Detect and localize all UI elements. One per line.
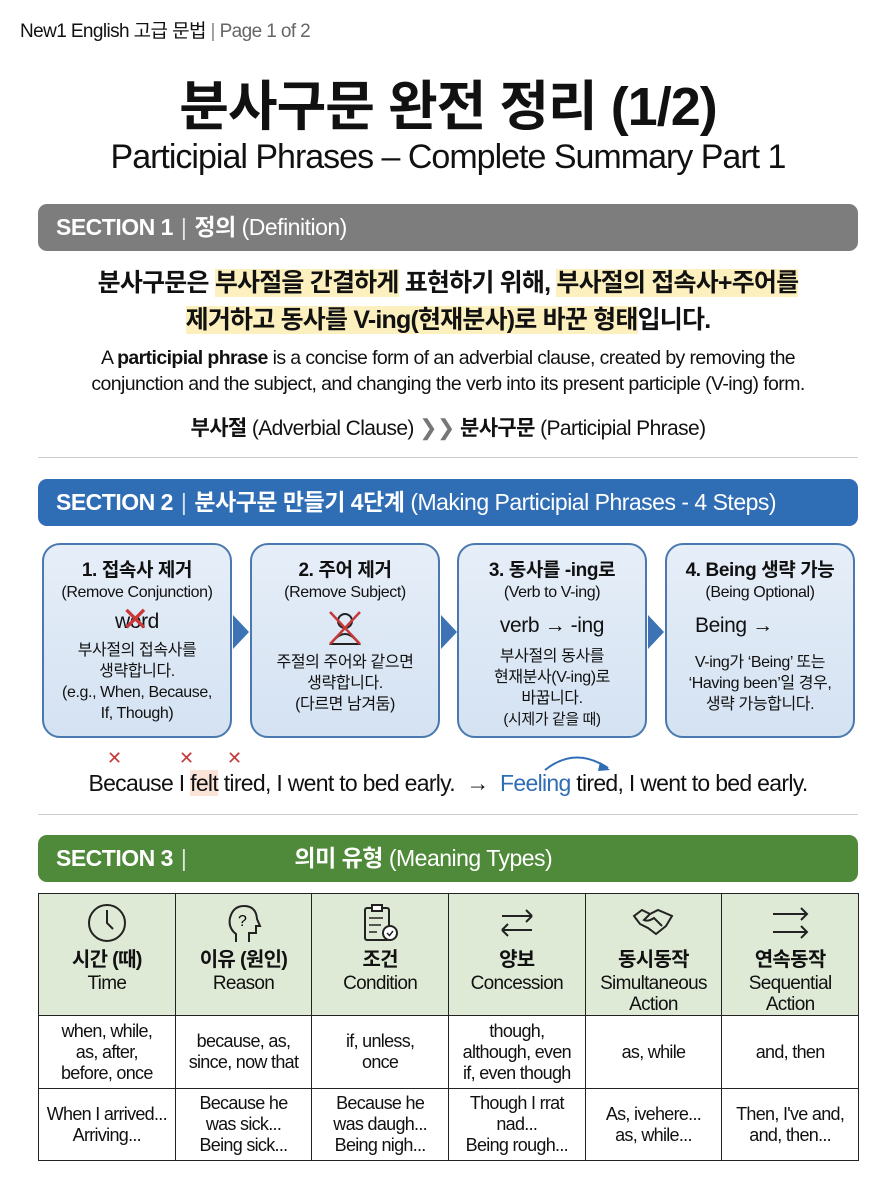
example sentence: ✕ bbox=[107, 748, 122, 768]
step 4: 4. Being 생략 가능 bbox=[686, 560, 834, 581]
meaning types table: Simultaneous bbox=[600, 973, 707, 994]
meaning types table: Because he bbox=[199, 1093, 288, 1113]
meaning types table: Though I rrat bbox=[470, 1093, 564, 1113]
meaning types table: if, unless, bbox=[346, 1031, 414, 1051]
step 3: 부사절의 동사를 bbox=[500, 648, 604, 665]
step 4: Being → bbox=[695, 614, 773, 637]
meaning types table: as, after, bbox=[76, 1042, 138, 1062]
step 1: 생략합니다. bbox=[99, 663, 175, 680]
meaning types table: 시간 (때) bbox=[72, 949, 142, 971]
meaning types table: because, as, bbox=[197, 1031, 290, 1051]
step 4: (Being Optional) bbox=[705, 584, 815, 601]
meaning types table: though, bbox=[489, 1020, 544, 1040]
example sentence bbox=[88, 748, 808, 796]
Korean definition bbox=[98, 269, 798, 334]
meaning types table: 이유 (원인) bbox=[200, 949, 287, 971]
meaning types table: although, even bbox=[463, 1042, 571, 1062]
meaning types table: As, ivehere... bbox=[606, 1104, 701, 1124]
section 3 bar: SECTION 3 | 의미 유형 (Meaning Types) bbox=[56, 845, 552, 871]
step 4: 생략 가능합니다. bbox=[706, 696, 814, 713]
meaning types table: Sequential bbox=[749, 973, 832, 994]
section 1 bar: SECTION 1 | 정의 (Definition) bbox=[56, 214, 347, 240]
step 2: 생략합니다. bbox=[307, 675, 383, 692]
step 2 bbox=[250, 543, 440, 738]
icon: crossed person bbox=[329, 611, 361, 645]
meaning types table: when, while, bbox=[62, 1020, 152, 1040]
step 4 bbox=[665, 543, 855, 738]
step 1: 부사절의 접속사를 bbox=[78, 642, 196, 659]
step 3 bbox=[457, 543, 647, 738]
step 2: (Remove Subject) bbox=[284, 584, 406, 601]
meaning types table: Then, I've and, bbox=[736, 1104, 844, 1124]
section 3 bar bbox=[38, 835, 858, 882]
Korean definition: 제거하고 동사를 V-ing(현재분사)로 바꾼 형태입니다. bbox=[186, 306, 710, 334]
step 3: 바꿉니다. bbox=[521, 690, 583, 707]
meaning types table: Being rough... bbox=[466, 1135, 568, 1155]
meaning types table: Reason bbox=[213, 973, 274, 994]
example sentence: Because I felt tired, I went to bed early. → Feeling tired, I went to bed early. bbox=[88, 770, 808, 796]
English definition: A participial phrase is a concise form of an adverbial clause, created by removing the bbox=[101, 347, 795, 369]
meaning types table: Being sick... bbox=[200, 1135, 287, 1155]
step 1: (Remove Conjunction) bbox=[61, 584, 213, 601]
step 1: 1. 접속사 제거 bbox=[82, 560, 192, 581]
meaning types table: if, even though bbox=[463, 1062, 571, 1082]
example sentence: ✕ bbox=[179, 748, 194, 768]
meaning types table: ? bbox=[238, 913, 247, 930]
subtitle: Participial Phrases – Complete Summary Part 1 bbox=[111, 138, 785, 176]
step 4: ‘Having been’일 경우, bbox=[689, 675, 831, 692]
arrow 3 bbox=[648, 615, 664, 649]
meaning types table: since, now that bbox=[189, 1052, 298, 1072]
meaning types table: once bbox=[362, 1052, 398, 1072]
step 3: (Verb to V-ing) bbox=[504, 584, 600, 601]
meaning types table: Being nigh... bbox=[335, 1135, 426, 1155]
step 3: verb → -ing bbox=[500, 614, 604, 637]
meaning types table: as, while... bbox=[615, 1124, 692, 1144]
example sentence: ✕ bbox=[227, 748, 242, 768]
meaning types table: 연속동작 bbox=[755, 949, 826, 971]
meaning types table: Action bbox=[766, 994, 814, 1015]
title: 분사구문 완전 정리 (1/2) bbox=[179, 77, 717, 137]
arrow 1 bbox=[233, 615, 249, 649]
meaning types table: 양보 bbox=[499, 949, 534, 971]
meaning types table: and, then... bbox=[749, 1124, 831, 1144]
section 1 bar bbox=[38, 204, 858, 251]
meaning types table: 동시동작 bbox=[618, 949, 689, 971]
meaning types table: Time bbox=[87, 973, 126, 994]
step 2: 2. 주어 제거 bbox=[298, 560, 392, 581]
meaning types table: and, then bbox=[756, 1042, 825, 1062]
meaning types table: Because he bbox=[336, 1093, 424, 1113]
step 1 bbox=[42, 543, 232, 738]
meaning types table: Arriving... bbox=[73, 1124, 141, 1144]
meaning types table bbox=[38, 893, 859, 1161]
English definition: conjunction and the subject, and changing the verb into its present participle (V-ing) form. bbox=[91, 373, 805, 395]
meaning types table: was sick... bbox=[206, 1114, 281, 1134]
section 2 bar: SECTION 2 | 분사구문 만들기 4단계 (Making Participial Phrases - 4 Steps) bbox=[56, 489, 776, 515]
step 2: 주절의 주어와 같으면 bbox=[276, 654, 413, 671]
English definition bbox=[91, 347, 805, 395]
step 1: (e.g., When, Because, bbox=[62, 684, 212, 701]
meaning types table: before, once bbox=[61, 1062, 153, 1082]
section 2 bar bbox=[38, 479, 858, 526]
meaning types table: Concession bbox=[471, 973, 563, 994]
meaning types table: was daugh... bbox=[333, 1114, 427, 1134]
step 4: V-ing가 ‘Being’ 또는 bbox=[695, 654, 825, 671]
meaning types table: as, while bbox=[622, 1042, 685, 1062]
meaning types table: nad... bbox=[496, 1114, 537, 1134]
step 3: 3. 동사를 -ing로 bbox=[489, 560, 615, 581]
formula: clause to phrase: 부사절 (Adverbial Clause) ❯❯ 분사구문 (Participial Phrase) bbox=[190, 415, 706, 440]
icon: crossed word: word bbox=[115, 610, 159, 633]
meaning types table: Condition bbox=[343, 973, 417, 994]
meaning types table: When I arrived... bbox=[47, 1104, 167, 1124]
meaning types table: Action bbox=[629, 994, 678, 1015]
header line: New1 English 고급 문법 | Page 1 of 2 bbox=[20, 21, 310, 42]
arrow 2 bbox=[441, 615, 457, 649]
step 2: (다르면 남겨둠) bbox=[295, 696, 395, 713]
icon: crossed word bbox=[115, 601, 159, 639]
step 3: 현재분사(V-ing)로 bbox=[494, 669, 610, 686]
icon: crossed word: ✕ bbox=[121, 601, 149, 639]
step 3: (시제가 같을 때) bbox=[503, 711, 601, 728]
meaning types table: 조건 bbox=[362, 949, 398, 971]
step 1: If, Though) bbox=[101, 705, 173, 722]
Korean definition: 분사구문은 부사절을 간결하게 표현하기 위해, 부사절의 접속사+주어를 bbox=[98, 269, 798, 297]
